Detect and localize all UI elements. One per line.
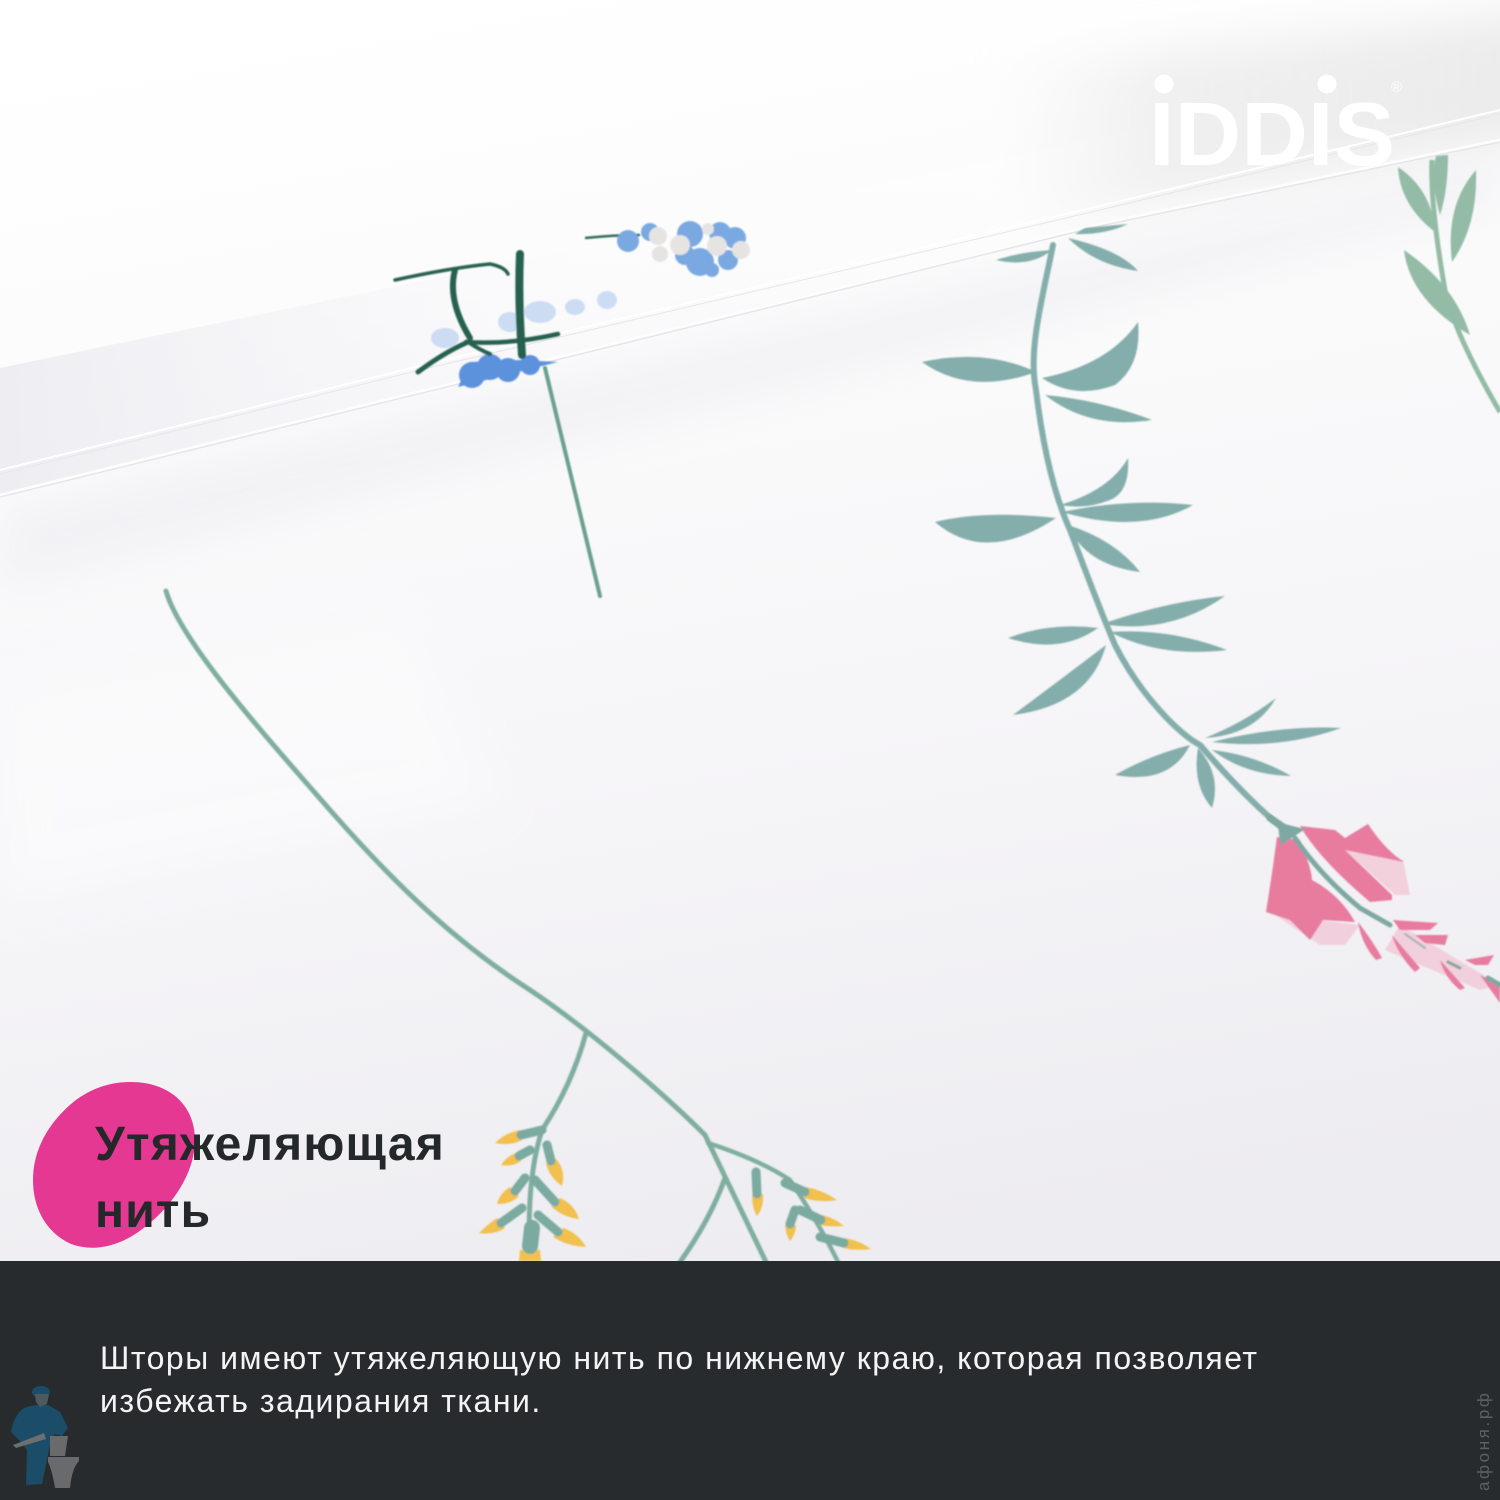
heading: Утяжеляющая <box>95 1118 445 1171</box>
logo: IDDIS: IDDIS <box>1149 85 1395 185</box>
pink flower <box>1266 818 1500 1003</box>
long stem with yellow buds <box>166 591 871 1262</box>
blue flower, dark stems on hem <box>395 254 617 388</box>
hem fold <box>0 10 1500 497</box>
site watermark: афоня.рф <box>1474 1391 1493 1491</box>
text panel: dark bottom bar <box>0 1261 1500 1500</box>
body text: Шторы имеют утяжеляющую нить по нижнему краю, которая позволяет <box>100 1340 1259 1376</box>
logo: IDDIS: ® <box>1391 79 1402 96</box>
vine with green leaves <box>922 224 1341 826</box>
heading <box>95 1118 445 1238</box>
body text <box>100 1340 1259 1419</box>
thin stem below hem <box>545 368 600 596</box>
pink blob behind heading <box>33 1082 195 1248</box>
heading: нить <box>95 1185 211 1238</box>
shaded diagonal folds in fabric <box>0 160 1500 900</box>
top right green sprig <box>1398 155 1500 412</box>
blue flower print on hem <box>585 221 750 277</box>
body text: избежать задирания ткани. <box>100 1383 542 1419</box>
